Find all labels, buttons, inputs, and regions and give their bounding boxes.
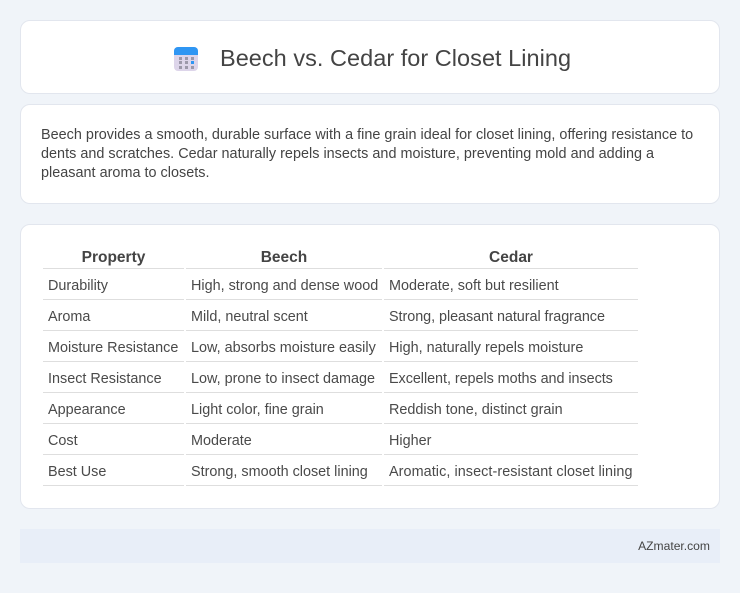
footer credit: AZmater.com <box>638 539 710 553</box>
header: Beech: Beech <box>261 249 307 266</box>
comparison table: Excellent, repels moths and insects <box>389 371 613 387</box>
comparison table: Low, prone to insect damage <box>191 371 375 387</box>
comparison table: Reddish tone, distinct grain <box>389 402 563 418</box>
header: Cedar: Cedar <box>489 249 533 266</box>
comparison table: High, strong and dense wood <box>191 278 378 294</box>
comparison table: Strong, smooth closet lining <box>191 464 368 480</box>
comparison table: Light color, fine grain <box>191 402 324 418</box>
footer bar <box>20 529 720 563</box>
panel: comparison table <box>20 224 720 509</box>
row: Cost: Cost <box>48 433 78 449</box>
comparison table: Strong, pleasant natural fragrance <box>389 309 605 325</box>
summary text: pleasant aroma to closets. <box>41 165 210 181</box>
header: Property: Property <box>82 249 145 266</box>
summary text: Beech provides a smooth, durable surface with a fine grain ideal for closet lining, offering resistance to <box>41 127 693 143</box>
summary text <box>41 127 693 181</box>
comparison table: High, naturally repels moisture <box>389 340 583 356</box>
row: Aroma: Aroma <box>48 309 90 325</box>
row: Durability: Durability <box>48 278 108 294</box>
comparison table: Aromatic, insect-resistant closet lining <box>389 464 633 480</box>
comparison table: Mild, neutral scent <box>191 309 308 325</box>
comparison table: Low, absorbs moisture easily <box>191 340 376 356</box>
comparison table: Higher <box>389 433 431 449</box>
row: Appearance: Appearance <box>48 402 126 418</box>
row: Best Use: Best Use <box>48 464 106 480</box>
icon: calendar <box>174 47 198 71</box>
title: Beech vs. Cedar for Closet Lining <box>220 45 571 71</box>
panel: title card <box>20 20 720 94</box>
row: Moisture Resistance: Moisture Resistance <box>48 340 178 356</box>
comparison table: Moderate, soft but resilient <box>389 278 559 294</box>
comparison table <box>43 249 638 486</box>
summary text: dents and scratches. Cedar naturally repels insects and moisture, preventing mold and adding a <box>41 146 654 162</box>
row: Insect Resistance: Insect Resistance <box>48 371 162 387</box>
panel: summary <box>20 104 720 204</box>
comparison table: Moderate <box>191 433 252 449</box>
